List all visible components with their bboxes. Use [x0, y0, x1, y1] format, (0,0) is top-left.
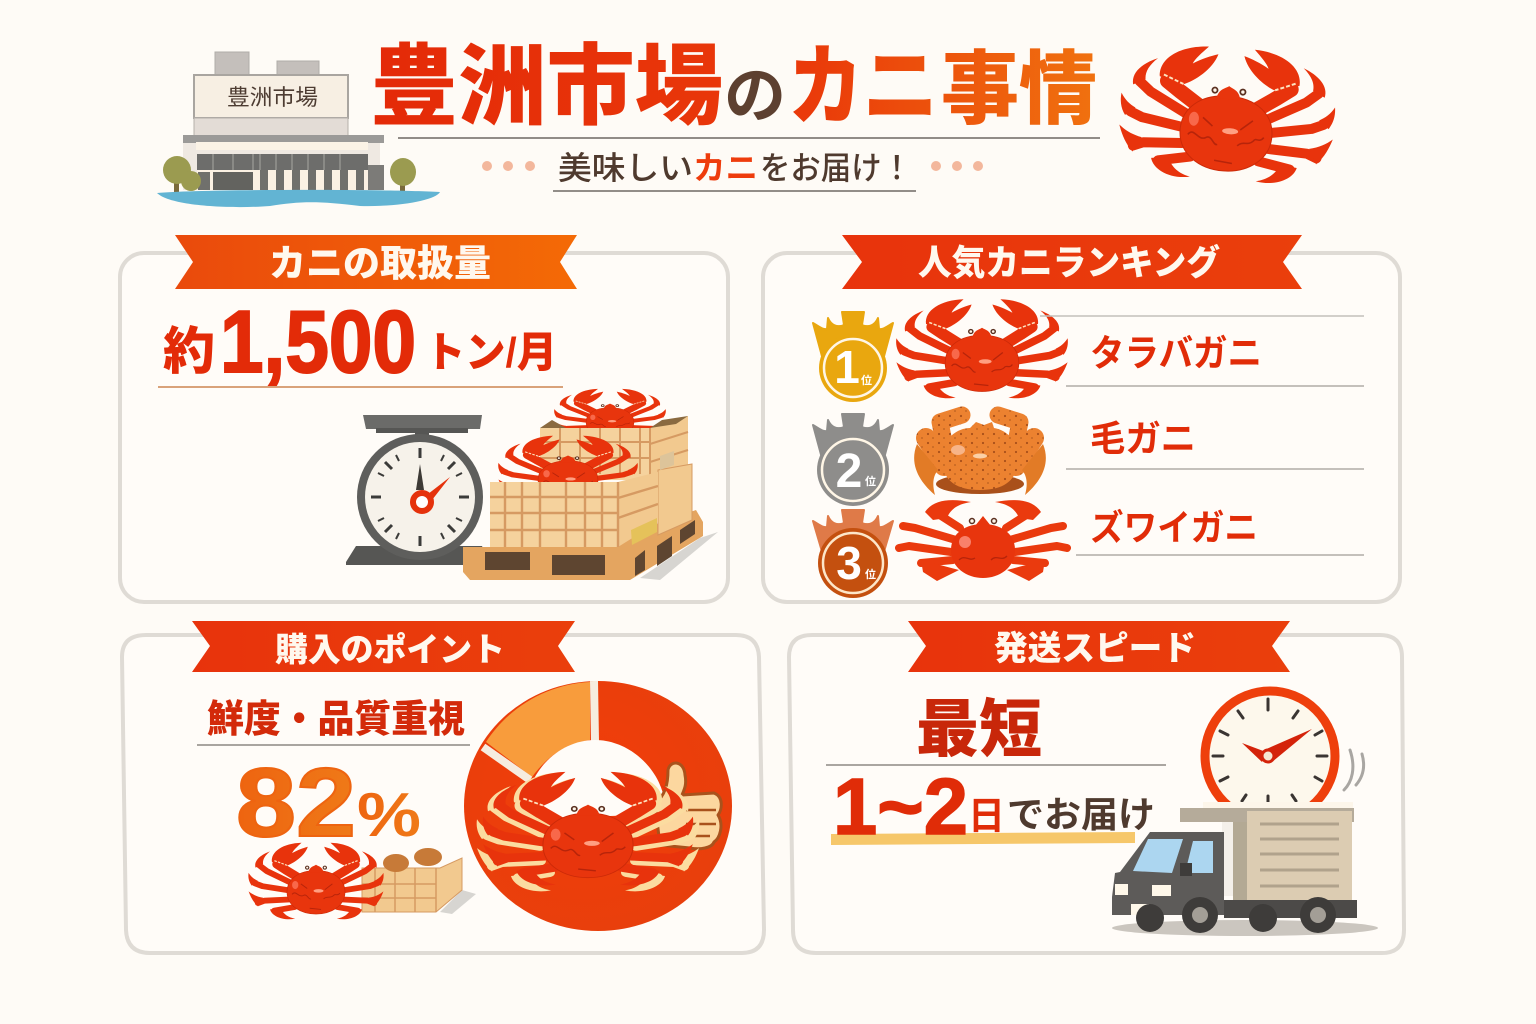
text: 1 to 2 days delivery: でお届け [1007, 794, 1155, 835]
medal: first place: 位 [861, 373, 872, 387]
ribbon: shipping speed heading: 発送スピード [994, 630, 1196, 668]
title: の [724, 62, 786, 131]
text: 1 to 2 days delivery: 1~2 [833, 762, 968, 851]
ribbon: crab volume heading: カニの取扱量 [269, 243, 491, 284]
text: freshness and quality: 鮮度・品質重視 [207, 699, 465, 741]
title [370, 37, 1097, 136]
subtitle: カニ [693, 150, 758, 186]
subtitle: をお届け！ [760, 150, 912, 186]
big number: 82 percent: 82 [236, 748, 356, 857]
big number: about 1,500 tons per month: 1,500 [220, 292, 416, 391]
ribbon: buying points heading [192, 621, 575, 672]
icon: crab in donut [477, 772, 699, 891]
chart: donut 82 percent [464, 681, 732, 931]
icon: boxes of crabs on pallet [463, 389, 718, 580]
big number: 82 percent: % [357, 781, 421, 850]
panel: shipping speed [789, 621, 1404, 953]
header illustration: Toyosu market building: 豊洲市場 [227, 85, 318, 110]
big number: about 1,500 tons per month [158, 292, 563, 391]
medal: third place [813, 510, 893, 598]
title: 豊洲市場 [370, 37, 723, 136]
ribbon: ranking heading [842, 235, 1302, 289]
title: カニ [788, 37, 938, 136]
ribbon: shipping speed heading [908, 621, 1290, 672]
ranking row 1: taraba crab [813, 299, 1364, 402]
text: 1 to 2 days delivery: 日 [968, 796, 1005, 838]
text: shortest: 最短 [916, 695, 1042, 765]
icon: clock [1205, 691, 1364, 821]
ribbon: ranking heading: 人気カニランキング [918, 243, 1220, 283]
label: hair crab: 毛ガニ [1090, 418, 1196, 459]
icon: header crab [1116, 41, 1339, 187]
medal: second place: 2 [836, 445, 862, 498]
icon: kitchen scale [346, 415, 490, 565]
medal: second place [813, 414, 893, 506]
icon: taraba crab [896, 299, 1068, 398]
medal: first place [813, 312, 893, 402]
icon: delivery truck [1112, 802, 1378, 936]
panel: buying points [122, 621, 764, 953]
medal: second place: 位 [865, 474, 876, 488]
medal: first place: 1 [834, 341, 860, 393]
label: snow crab: ズワイガニ [1090, 507, 1258, 548]
medal: third place: 3 [836, 537, 862, 589]
big number: about 1,500 tons per month: トン/月 [425, 329, 557, 376]
ranking row 2: hair crab [813, 414, 1364, 506]
highlight underline [831, 832, 1135, 845]
panel: crab volume [120, 235, 728, 602]
big number: 82 percent [236, 748, 421, 857]
title: 事情 [941, 45, 1097, 134]
title divider [398, 137, 1100, 139]
ribbon: crab volume heading [175, 235, 577, 289]
icon: crab with box [248, 843, 476, 919]
big number: about 1,500 tons per month: 約 [163, 323, 215, 380]
icon: snow crab [899, 500, 1067, 581]
ranking row 3: snow crab [813, 500, 1364, 598]
icon: hair crab [914, 415, 1046, 495]
icon: thumbs up hand [655, 763, 721, 849]
subtitle [482, 150, 983, 191]
panel: popular crab ranking [763, 235, 1400, 602]
medal: third place: 位 [865, 567, 876, 581]
header illustration: Toyosu market building [157, 52, 440, 207]
text: 1 to 2 days delivery [833, 762, 1155, 851]
ribbon: buying points heading: 購入のポイント [275, 631, 505, 668]
label: taraba crab: タラバガニ [1090, 333, 1262, 374]
subtitle: 美味しい [558, 150, 693, 186]
